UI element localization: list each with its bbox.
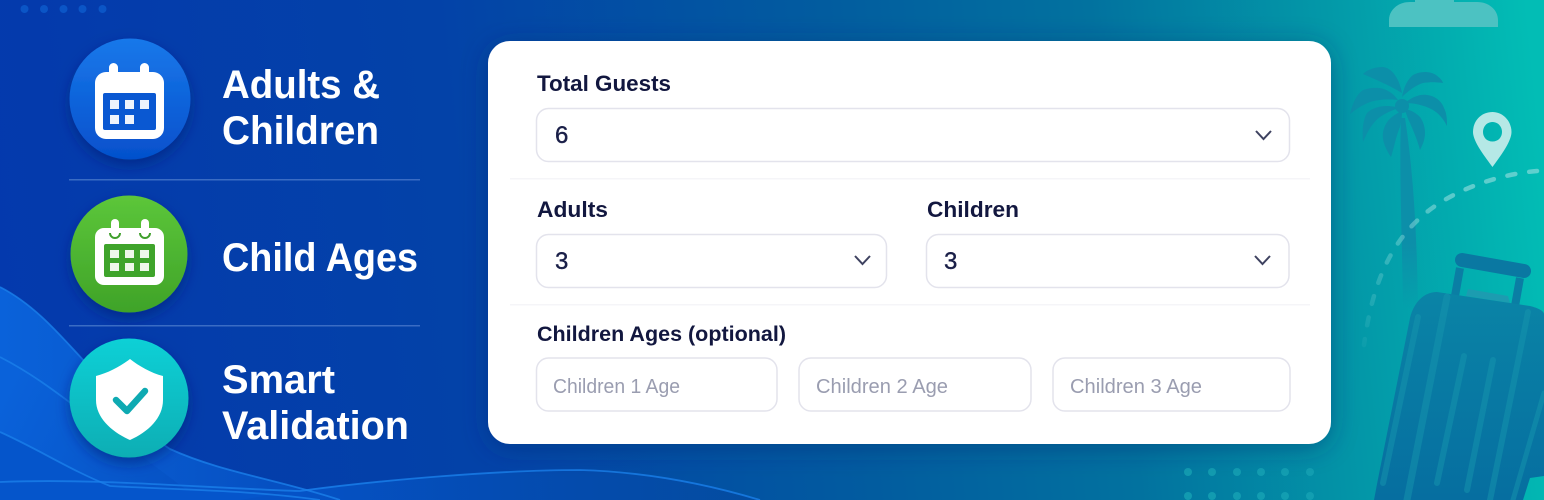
decorative dots bottom xyxy=(1184,468,1314,500)
heading: adults and children: Children xyxy=(222,109,379,153)
heading: smart validation: Validation xyxy=(222,404,409,448)
heading: adults and children xyxy=(222,63,380,153)
field: total guests xyxy=(536,71,1290,162)
icon: suitcase xyxy=(1374,260,1544,500)
background waves xyxy=(0,287,760,500)
field: adults xyxy=(536,197,886,288)
field group: children ages: Children Ages (optional) xyxy=(537,323,786,346)
field: children: Children xyxy=(927,197,1019,222)
icon: palm tree xyxy=(1350,67,1447,310)
field group: children ages: Children 3 Age xyxy=(1070,375,1202,398)
icon: cloud xyxy=(1389,0,1498,27)
field group: children ages xyxy=(536,323,1290,411)
dashed route xyxy=(1364,171,1537,345)
heading: smart validation: Smart xyxy=(222,358,335,402)
heading: smart validation xyxy=(222,358,409,448)
field: children: 3 xyxy=(944,248,957,275)
field: adults: 3 xyxy=(555,248,568,275)
heading: child ages: Child Ages xyxy=(222,236,418,280)
icon badge: child ages xyxy=(70,196,188,312)
icon: map pin xyxy=(1473,112,1512,167)
field group: children ages: Children 1 Age xyxy=(553,375,680,398)
field group: children ages: Children 2 Age xyxy=(816,375,948,398)
field: total guests: 6 xyxy=(555,122,568,149)
panel: guest form card xyxy=(488,41,1331,444)
decorative dots top left xyxy=(20,5,106,13)
icon badge: smart validation xyxy=(70,338,188,458)
field: adults: Adults xyxy=(537,197,608,222)
field: total guests: Total Guests xyxy=(537,71,671,96)
heading: adults and children: Adults & xyxy=(222,63,380,107)
icon badge: adults and children xyxy=(70,38,190,160)
field: children xyxy=(926,197,1289,288)
